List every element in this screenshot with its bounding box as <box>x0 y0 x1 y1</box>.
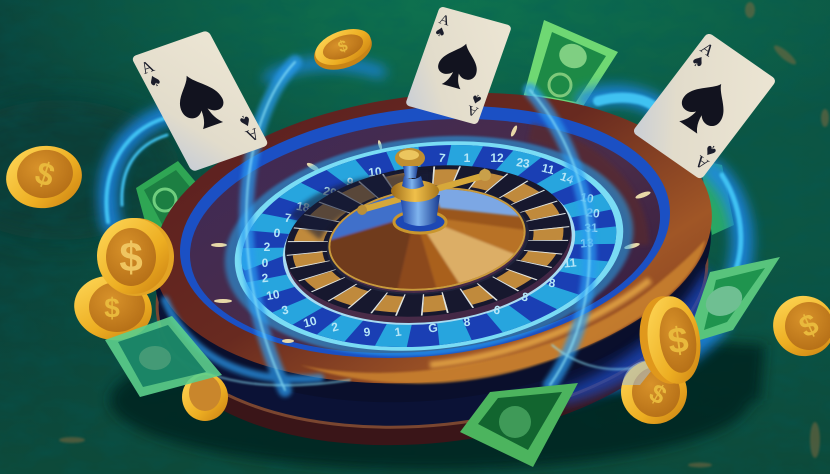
spindle arm <box>360 172 487 213</box>
playing card: right ace of spades: A <box>697 38 718 60</box>
coin: lower right translucent <box>621 360 687 424</box>
wheel numbers: 13 <box>580 236 594 250</box>
table shadow <box>110 330 765 470</box>
wheel numbers: 10 <box>302 313 319 330</box>
playing card: right ace of spades: ♠ <box>700 139 722 161</box>
wheel numbers: 9 <box>345 175 355 190</box>
coin: behind left <box>69 270 157 346</box>
bill: top behind wheel <box>523 20 618 108</box>
coin: upright right: $ <box>665 318 691 362</box>
big spade <box>670 72 739 140</box>
coin: upright right <box>634 293 706 387</box>
wheel numbers: 0 <box>273 226 281 240</box>
wheel numbers: 29 <box>322 184 338 200</box>
wheel numbers: 2 <box>264 240 271 254</box>
wheel numbers: 8 <box>463 315 471 329</box>
playing card: left ace of spades <box>131 30 269 172</box>
big spade <box>167 69 233 133</box>
coin: top: $ <box>336 37 350 57</box>
bill: right behind card <box>700 160 734 235</box>
coin: far right <box>765 287 830 365</box>
spindle <box>357 148 491 233</box>
bill: upper left behind wheel <box>136 161 215 240</box>
pocket ring <box>301 166 555 316</box>
big spade <box>432 39 485 92</box>
playing card: middle ace of spades: ♠ <box>469 90 485 107</box>
coin: behind left: $ <box>104 292 120 324</box>
wheel numbers: 11 <box>540 161 556 177</box>
swirl: back glow <box>107 64 742 396</box>
wheel numbers: 9 <box>363 325 371 339</box>
blue channel <box>167 83 683 381</box>
track markers <box>211 125 651 343</box>
coin: left <box>2 141 86 213</box>
wheel numbers <box>261 151 601 339</box>
coin: top <box>309 22 377 77</box>
wheel numbers: 23 <box>515 155 531 171</box>
playing card: left ace of spades: A <box>137 56 158 78</box>
wheel numbers: 8 <box>548 276 557 290</box>
bill: right <box>690 257 780 340</box>
coin: left: $ <box>31 154 59 194</box>
playing card: middle ace of spades <box>405 6 512 125</box>
cone <box>328 188 526 291</box>
wooden rim <box>140 67 726 409</box>
coin: large left <box>97 218 174 296</box>
wheel numbers: 12 <box>490 151 504 165</box>
wheel numbers: 20 <box>586 205 601 221</box>
wheel numbers: 10 <box>579 190 595 206</box>
number ring <box>221 121 637 371</box>
coin: lower left <box>182 373 228 421</box>
wheel numbers: 3 <box>280 302 290 318</box>
playing card: middle ace of spades: A <box>464 102 480 119</box>
playing card: middle ace of spades: ♠ <box>432 24 448 41</box>
wheel numbers: 6 <box>492 303 502 318</box>
wheel numbers: 1 <box>394 325 403 339</box>
coin: far right: $ <box>794 307 824 344</box>
wheel numbers: 8 <box>520 289 530 305</box>
wheel numbers: 7 <box>284 211 293 225</box>
playing card: left ace of spades: A <box>242 124 263 146</box>
wheel numbers: 1 <box>464 151 471 165</box>
wheel numbers: 2 <box>261 271 269 285</box>
playing card: middle ace of spades: A <box>437 12 453 29</box>
ball track <box>178 97 672 375</box>
swirl: front arcs <box>160 62 690 390</box>
playing card: right ace of spades: ♠ <box>687 51 709 73</box>
bill: lower left <box>105 316 222 397</box>
playing card: right ace of spades: A <box>691 152 712 174</box>
wheel numbers: 7 <box>438 151 447 165</box>
playing card: left ace of spades: ♠ <box>235 110 256 131</box>
playing card: right ace of spades <box>632 32 777 180</box>
wheel numbers: G <box>427 320 439 336</box>
coin: large left: $ <box>119 234 143 280</box>
wheel numbers: 10 <box>265 287 281 303</box>
playing card: left ace of spades: ♠ <box>144 71 165 92</box>
wheel numbers: 0 <box>262 256 269 270</box>
wheel numbers: 14 <box>558 169 576 187</box>
roulette wheel <box>156 92 716 446</box>
bill: bottom <box>460 383 578 467</box>
wheel numbers: 31 <box>584 221 598 235</box>
coin: lower right translucent: $ <box>644 377 672 411</box>
wheel numbers: 10 <box>368 164 383 180</box>
wheel numbers: 2 <box>330 319 340 335</box>
wheel base side <box>141 88 725 471</box>
wheel numbers: 18 <box>295 199 311 215</box>
wheel numbers: 11 <box>563 255 577 271</box>
